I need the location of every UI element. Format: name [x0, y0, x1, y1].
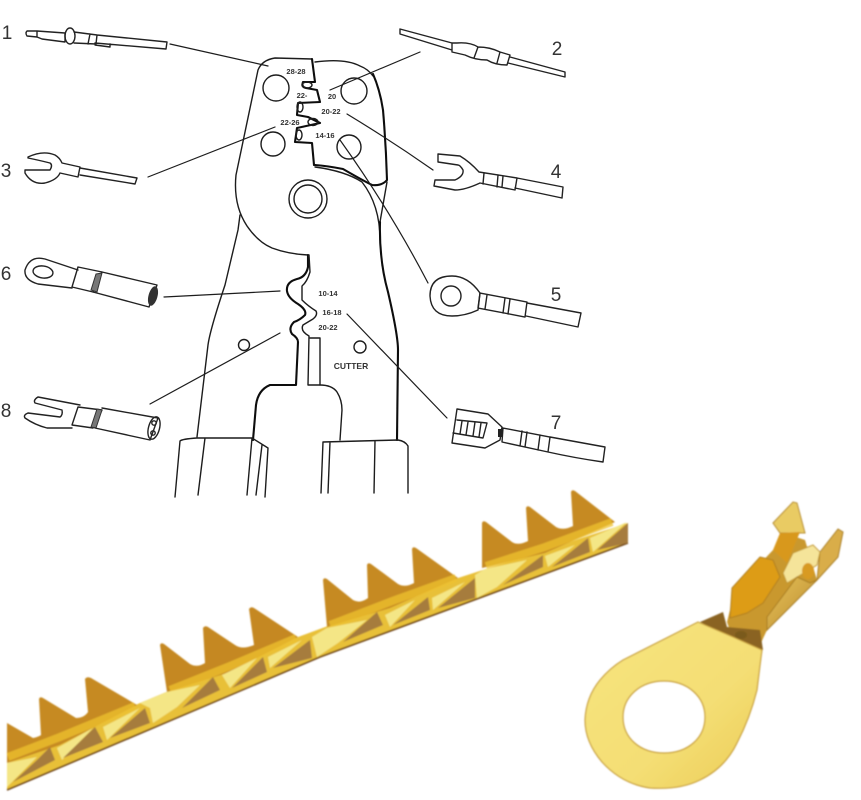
side wall [767, 577, 817, 630]
terminal numbers: 8 [1, 401, 11, 422]
gauge markings: 16-18 [322, 308, 342, 317]
terminal numbers: 4 [551, 162, 562, 183]
gauge markings: 28-28 [286, 67, 306, 76]
head holes [261, 75, 367, 159]
left handle grip [175, 438, 268, 497]
terminal 5: ring [430, 276, 581, 327]
ring plate with hole [585, 622, 762, 788]
rear crimp barrel [730, 557, 780, 618]
terminal 7: female spade [452, 409, 605, 462]
terminal numbers [1, 23, 562, 434]
tooth group 4 [482, 490, 615, 568]
terminal 3: fork [25, 153, 137, 184]
gauge markings: 20 [328, 92, 336, 101]
orange detail [802, 563, 814, 579]
strip teeth and body [7, 523, 628, 790]
rivet holes [238, 340, 366, 353]
handle outlines [197, 215, 240, 437]
terminal numbers: 1 [2, 23, 12, 44]
gauge markings: 14-16 [315, 131, 335, 140]
terminal 8: insulated fork [24, 397, 162, 441]
gauge markings: 22-26 [280, 118, 300, 127]
dark barrel neck [700, 612, 763, 650]
gauge markings: CUTTER [334, 361, 368, 371]
pliers head outline [235, 58, 312, 255]
pivot bolt [289, 180, 327, 218]
small curled teeth details [296, 82, 318, 140]
cream channel [783, 545, 820, 583]
gauge markings: 20-22 [321, 107, 341, 116]
gauge markings [280, 67, 368, 371]
gauge markings: 22- [297, 91, 308, 100]
terminal numbers: 2 [552, 39, 562, 60]
gauge markings: 10-14 [318, 289, 338, 298]
gauge markings: 20-22 [318, 323, 338, 332]
tooth group 1 [7, 677, 137, 763]
terminal numbers: 3 [1, 161, 11, 182]
lower jaw crimp profile [253, 255, 308, 440]
leader lines [148, 44, 447, 418]
barrel base connecting all parts [727, 535, 817, 645]
ring dark shading [735, 631, 747, 639]
brown folded facets [13, 523, 628, 782]
left rear tab [773, 502, 805, 533]
strip lower edge [7, 543, 628, 790]
terminal numbers: 5 [551, 285, 561, 306]
terminal 1: pin [26, 28, 167, 49]
terminal numbers: 7 [551, 413, 561, 434]
right handle grip [321, 440, 408, 493]
light yellow facets [7, 522, 627, 787]
tooth group 3 [323, 547, 458, 627]
terminal 6: insulated ring [25, 258, 160, 307]
tooth base glow [8, 522, 612, 757]
terminal 4: fork [434, 154, 563, 198]
terminal numbers: 6 [1, 264, 11, 285]
inner orange wire crimp [773, 532, 800, 563]
right front tab [817, 529, 843, 580]
gold ring terminal photo [585, 502, 843, 788]
upper jaw teeth [295, 59, 320, 165]
thick right head edge [315, 74, 387, 185]
cutter slot [310, 338, 320, 385]
tooth group 2 [160, 607, 298, 692]
crimping pliers line drawing [148, 44, 447, 497]
terminal 2: pin [400, 29, 565, 77]
gold terminal strip photo [7, 490, 628, 790]
